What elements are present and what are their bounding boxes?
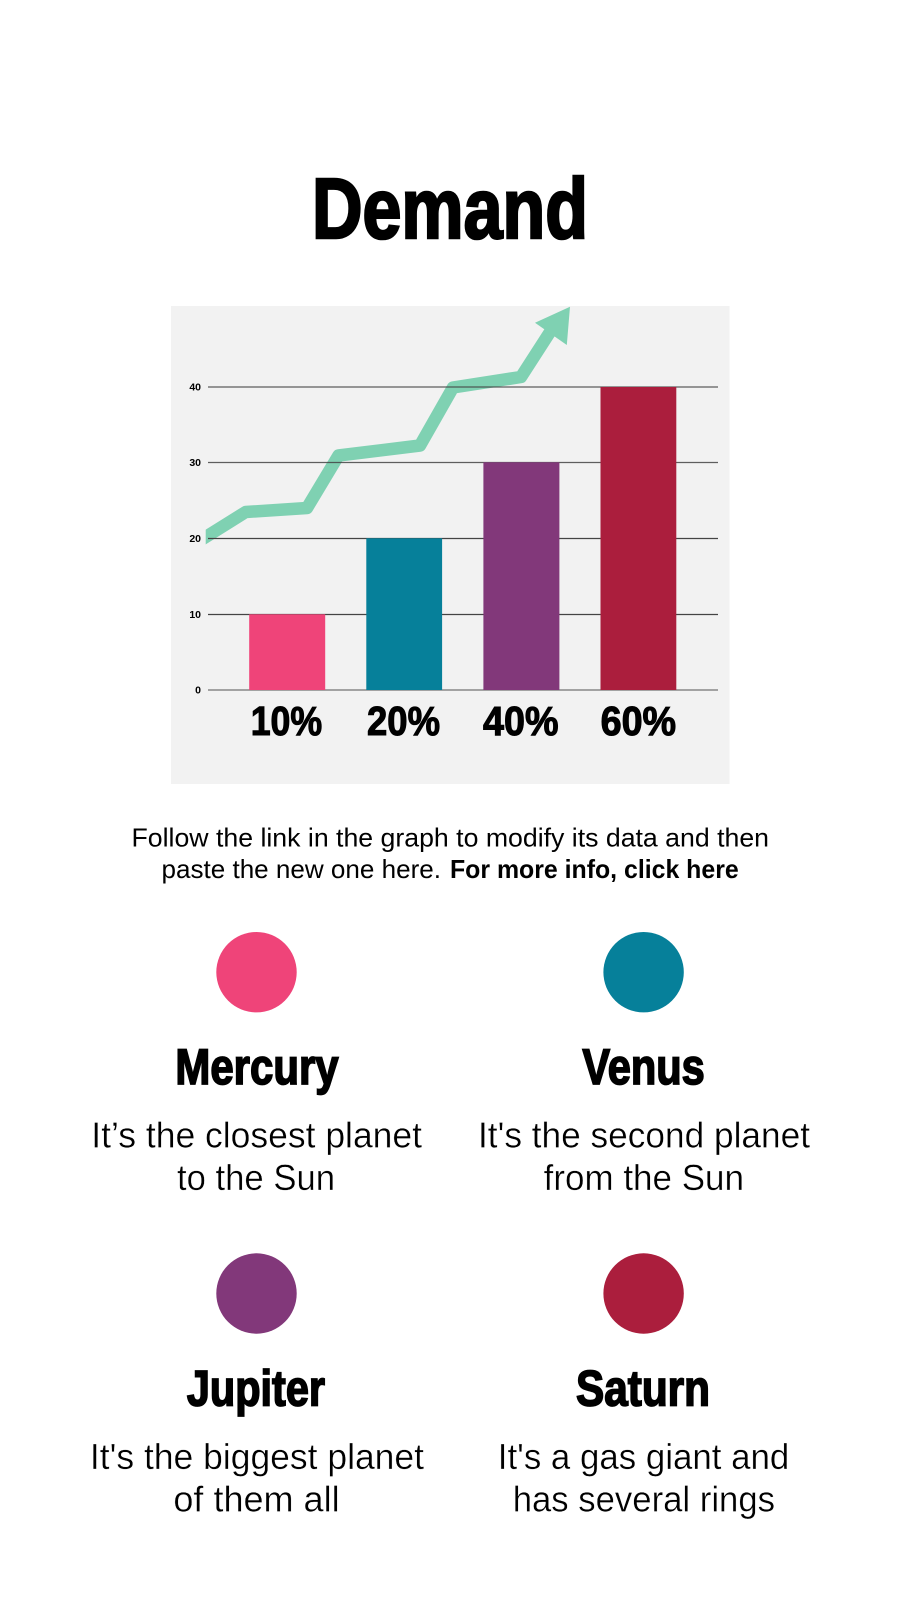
description: Venus: from the Sun [544, 1157, 744, 1198]
description: Venus [478, 1114, 810, 1198]
chart gridlines and axis labels: 30 [189, 457, 201, 469]
description: Saturn: has several rings [513, 1479, 775, 1520]
icon: crimson circle [603, 1253, 684, 1334]
bar: 60% crimson [600, 387, 676, 690]
description: Jupiter: of them all [173, 1479, 340, 1520]
bar value labels: 40% [483, 698, 558, 744]
caption text: paste the new one here. [162, 854, 441, 884]
bar value labels [251, 698, 676, 744]
chart gridlines and axis labels: 40 [189, 382, 201, 394]
caption text: Follow the link in the graph to modify its data and then [132, 823, 769, 853]
bar value labels: 20% [367, 698, 440, 744]
description: Saturn [498, 1436, 789, 1520]
description: Mercury [91, 1114, 422, 1198]
chart gridlines and axis labels [189, 382, 718, 697]
chart gridlines and axis labels: 20 [189, 533, 201, 545]
chart gridlines and axis labels: 10 [189, 609, 201, 621]
icon: purple circle [216, 1253, 297, 1334]
description: Jupiter: It's the biggest planet [90, 1436, 424, 1477]
item: Saturn [498, 1253, 789, 1520]
heading: Venus: Venus [582, 1039, 705, 1095]
description: Saturn: It's a gas giant and [498, 1436, 789, 1477]
description: Mercury: It’s the closest planet [91, 1114, 422, 1155]
description: Jupiter [90, 1436, 424, 1520]
description: Mercury: to the Sun [177, 1157, 335, 1198]
icon: pink circle [216, 932, 297, 1012]
arrow: rising trend [198, 307, 570, 542]
bar value labels: 60% [601, 698, 676, 744]
bar: 20% teal [366, 538, 442, 690]
caption text: For more info, click here [450, 854, 739, 884]
icon: teal circle [603, 932, 684, 1012]
bar: 10% pink [249, 614, 325, 690]
heading: Mercury: Mercury [175, 1039, 339, 1095]
bar: 40% purple [483, 462, 559, 690]
heading: Saturn: Saturn [576, 1361, 710, 1417]
bar value labels: 10% [251, 698, 322, 744]
caption text [132, 823, 769, 884]
panel: bar chart [171, 306, 730, 784]
chart gridlines and axis labels: 0 [195, 685, 201, 697]
item: Jupiter [90, 1253, 424, 1520]
title: Demand [312, 162, 588, 257]
description: Venus: It's the second planet [478, 1114, 810, 1155]
item: Venus [478, 932, 810, 1198]
heading: Jupiter: Jupiter [187, 1361, 325, 1417]
item: Mercury [91, 932, 422, 1198]
